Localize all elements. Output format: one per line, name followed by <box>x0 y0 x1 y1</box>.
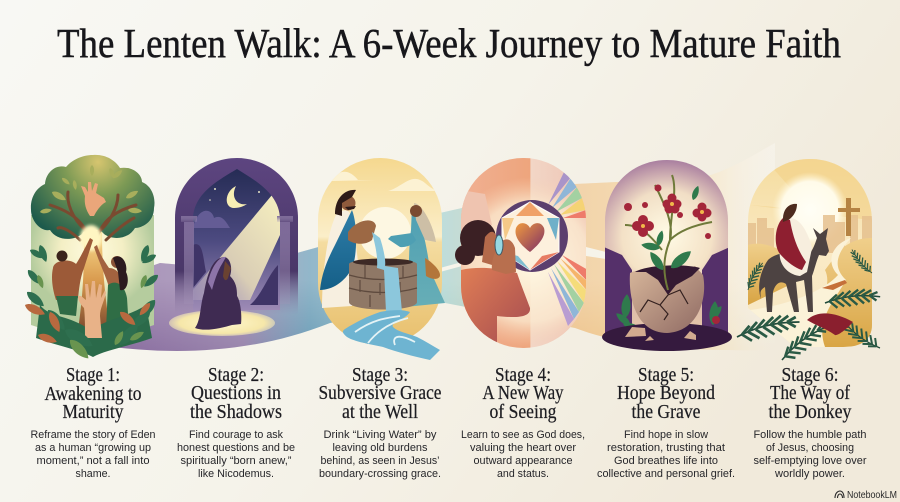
stage 4 heading: A New Way <box>482 383 564 404</box>
stage 4 heading <box>482 365 564 423</box>
stage 6 heading: The Way of <box>770 383 850 404</box>
stage 4 heading: Stage 4: <box>495 365 551 386</box>
stage 6 illustration: way of the donkey <box>737 157 882 363</box>
dome background <box>605 160 728 340</box>
base shadow <box>602 323 732 351</box>
stage 5 description: God breathes life into <box>614 455 718 467</box>
stars <box>209 188 260 201</box>
stage 3 description <box>319 429 441 480</box>
stage 1 heading: Maturity <box>62 402 124 423</box>
woman figure <box>388 203 445 307</box>
capsule background <box>461 158 586 348</box>
stage 5 heading: the Grave <box>632 402 700 423</box>
stage 1 description: shame. <box>76 468 110 480</box>
stage 6 description: of Jesus, choosing <box>766 442 854 454</box>
stage 6 heading: Stage 6: <box>782 365 838 386</box>
gem ring <box>496 200 568 272</box>
stage 5 heading: Stage 5: <box>638 365 694 386</box>
stage 4 heading: of Seeing <box>490 402 557 423</box>
distant city <box>748 215 872 253</box>
upraised hand <box>78 281 106 338</box>
glow of light <box>80 225 102 251</box>
stage 3 heading: Subversive Grace <box>318 383 442 404</box>
donkey <box>759 228 829 312</box>
stage 1 heading: Stage 1: <box>66 365 120 386</box>
pillars <box>181 216 293 304</box>
stage 5 description: collective and personal grief. <box>597 468 735 480</box>
stage 2 description <box>177 429 295 480</box>
hills <box>193 244 206 288</box>
stage 2 description: like Nicodemus. <box>198 468 274 480</box>
glowing trunk <box>78 232 110 330</box>
stage 4 illustration: new way of seeing <box>455 158 588 348</box>
stage 1 text <box>30 365 156 480</box>
stage 3 text <box>318 365 442 480</box>
stage 4 text <box>461 365 585 480</box>
stage 6 description: worldly power. <box>774 468 845 480</box>
crescent moon <box>227 186 247 208</box>
pink left band <box>461 190 492 235</box>
water stream <box>372 232 402 312</box>
stage 4 description: and status. <box>497 468 549 480</box>
stage 3 description: boundary-crossing grace. <box>319 468 441 480</box>
stage 2 heading: Stage 2: <box>208 365 264 386</box>
lower rainbow rays <box>562 255 586 280</box>
stage 1 heading <box>44 365 142 423</box>
beam of light <box>193 195 280 300</box>
pale green backdrop <box>31 215 154 345</box>
discarded orange cloth <box>822 280 847 290</box>
stage 4 description: valuing the heart over <box>470 442 576 454</box>
hills <box>748 244 787 305</box>
stage 5 description: Find hope in slow <box>624 429 708 441</box>
reaching hand in tree <box>81 182 106 216</box>
woman figure <box>94 245 129 330</box>
stage 2 description: spiritually “born anew,” <box>180 455 292 467</box>
crown leaves <box>40 165 142 214</box>
stone arch <box>175 158 298 315</box>
hexagon gem <box>502 202 559 270</box>
stage 1 description <box>30 429 156 480</box>
stage 5 illustration: hope beyond the grave <box>600 155 735 351</box>
stage 1 illustration: tree of awakening <box>23 155 160 362</box>
sun with rays <box>756 159 872 219</box>
tree crown <box>31 155 154 239</box>
journey ribbon path <box>113 143 775 351</box>
stage 1 description: Reframe the story of Eden <box>30 429 156 441</box>
stage 6 description: Follow the humble path <box>754 429 866 441</box>
dark hills <box>605 248 632 333</box>
stage 3 heading <box>318 365 442 423</box>
stones <box>625 327 696 341</box>
arch background <box>748 159 872 347</box>
oval background <box>318 158 442 345</box>
discarded red cloak <box>807 313 853 335</box>
stage 4 description: outward appearance <box>474 455 572 467</box>
stone well <box>349 260 417 310</box>
foliage: lower leaves <box>24 244 160 351</box>
stage 1 heading: Awakening to <box>44 384 142 405</box>
stage 4 description <box>461 429 585 480</box>
stage 6 heading: the Donkey <box>768 402 852 423</box>
stage 5 description: restoration, trusting that <box>607 442 725 454</box>
stage 3 illustration: well <box>318 158 445 360</box>
Jesus figure <box>320 190 358 308</box>
woman's head <box>460 220 496 256</box>
stage 6 text <box>754 365 867 480</box>
stage 2 description: honest questions and be <box>177 442 295 454</box>
side plants <box>616 294 722 326</box>
flowing river <box>343 310 440 360</box>
palm fronds <box>737 245 882 363</box>
rider <box>779 218 812 276</box>
stage 3 heading: at the Well <box>342 402 419 423</box>
stage 3 description: leaving old burdens <box>332 442 428 454</box>
sun <box>359 207 411 259</box>
stage 6 description <box>754 429 867 480</box>
stage 3 description: behind, as seen in Jesus’ <box>320 455 440 467</box>
night sky <box>193 169 280 310</box>
stage 5 heading: Hope Beyond <box>617 383 715 404</box>
stage 3 description: Drink “Living Water” by <box>324 429 437 441</box>
stage 5 heading <box>617 365 715 423</box>
clay jar <box>348 220 376 244</box>
upper rainbow rays <box>548 172 570 204</box>
clouds <box>332 172 375 181</box>
stage 2 text <box>177 365 295 480</box>
stage 6 heading <box>768 365 852 423</box>
stage 4 description: Learn to see as God does, <box>461 429 585 441</box>
foliage mass <box>36 305 152 357</box>
winding road <box>750 238 851 347</box>
red flowers <box>624 184 720 324</box>
stage 2 heading <box>190 365 282 423</box>
wooden cross <box>838 198 860 236</box>
stage 5 text <box>597 365 735 480</box>
stage 3 heading: Stage 3: <box>352 365 408 386</box>
stage 2 illustration: night arch <box>169 158 298 336</box>
stage 6 description: self-emptying love over <box>754 455 867 467</box>
shirt and shoulders <box>461 268 530 348</box>
icon: NotebookLM mark <box>835 491 844 498</box>
stage 2 heading: the Shadows <box>190 402 282 423</box>
stage 5 description <box>597 429 735 480</box>
plant stems <box>625 175 712 290</box>
heart <box>516 223 544 252</box>
green leaves <box>641 185 701 272</box>
stage 2 description: Find courage to ask <box>189 429 283 441</box>
branches <box>50 192 136 240</box>
clouds <box>193 211 230 228</box>
stage 1 description: moment,” not a fall into <box>36 455 150 467</box>
face and hands <box>482 232 499 265</box>
seated figure <box>195 257 241 330</box>
magnifying lens <box>495 235 503 255</box>
stage 1 description: as a human “growing up <box>35 442 151 454</box>
cracked egg <box>630 266 704 333</box>
stage 2 heading: Questions in <box>191 383 281 404</box>
man figure <box>52 238 93 316</box>
floor light pool <box>169 310 275 336</box>
